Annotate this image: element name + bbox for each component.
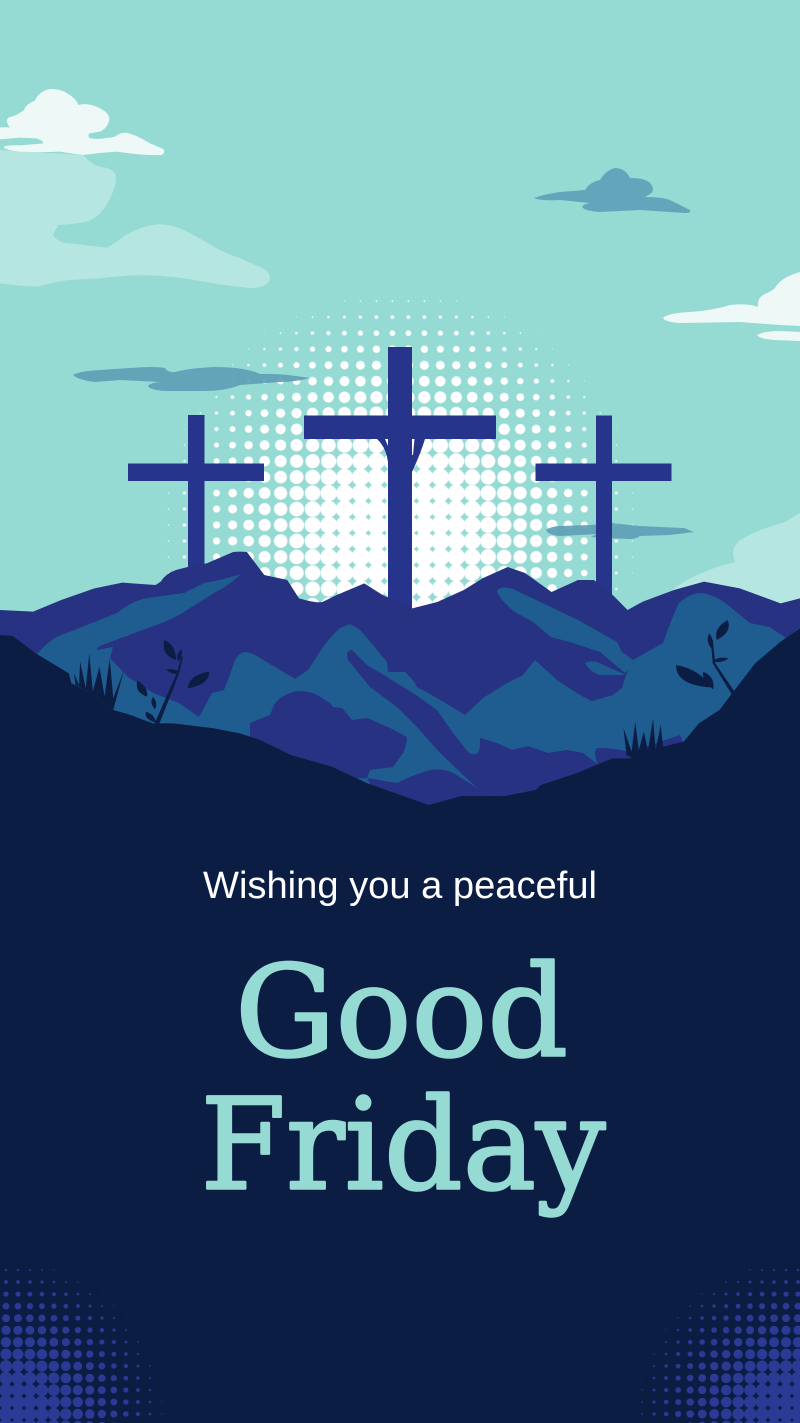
cloud: slate top right: [534, 168, 690, 213]
foreground navy hills: [0, 628, 800, 820]
halftone sun: [0, 293, 800, 613]
plant: left: [137, 640, 209, 724]
cloud: translucent right: [672, 513, 800, 610]
title line: Friday: Friday: [200, 1072, 606, 1218]
cross: centre with figure: [304, 347, 496, 672]
cross: right: [536, 416, 672, 600]
dark streak centre with lower right foothills: [347, 650, 600, 800]
dark cloud-form lower left: [250, 691, 407, 780]
grass: right: [623, 718, 663, 758]
cross: left: [128, 415, 264, 595]
figure highlights: [385, 439, 414, 455]
teal finger right: [585, 661, 626, 675]
dark foothill blob right: [595, 735, 690, 770]
mid teal-blue range: [30, 574, 800, 800]
subtitle: Wishing you a peaceful: [203, 865, 597, 907]
teal streak right: [497, 588, 636, 673]
foreground navy hills and plants: [0, 620, 800, 820]
cloud: white top left: [0, 89, 164, 155]
three crosses: [128, 347, 672, 672]
halftone corner: bottom left: [0, 1243, 190, 1423]
plant: right: [676, 620, 736, 695]
cloud: slate right over sun: [546, 523, 694, 539]
back mountain silhouette: [0, 552, 800, 820]
grass: left: [74, 653, 124, 710]
cloud: white right: [663, 272, 800, 341]
title line: Good: Good: [235, 938, 568, 1086]
cloud: large translucent left: [0, 150, 270, 288]
halftone corner: bottom right: [610, 1243, 800, 1423]
dark arc under wedge: [367, 770, 500, 800]
cloud: slate left over sun: [73, 367, 310, 391]
